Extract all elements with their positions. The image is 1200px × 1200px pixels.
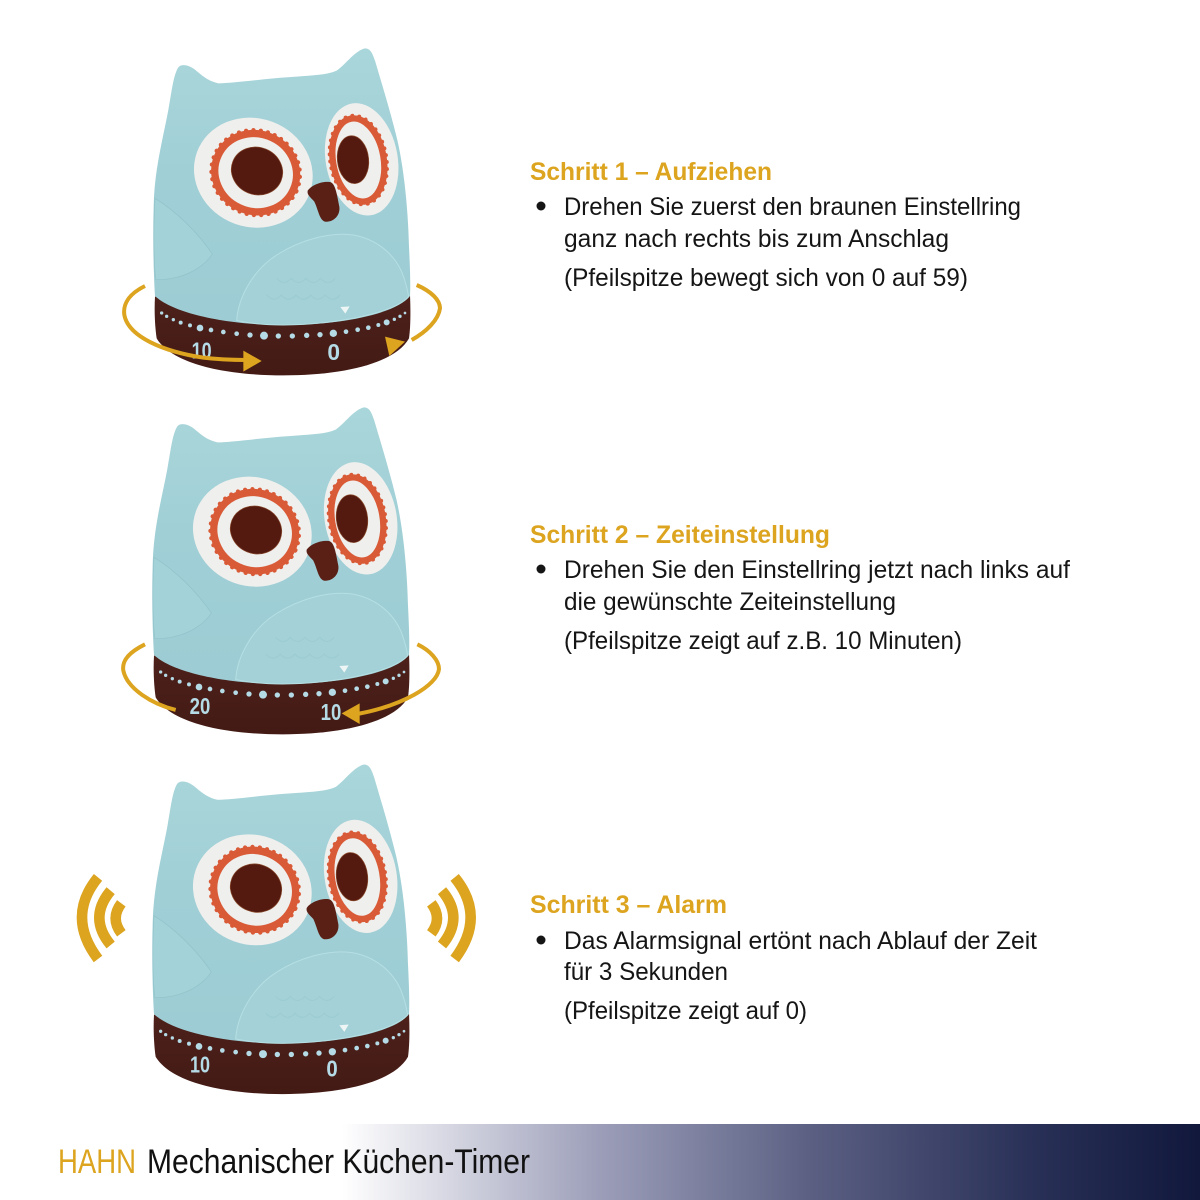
heading: step 3: Schritt 3 – Alarm bbox=[530, 891, 727, 919]
arrow: turn ring to the right bbox=[124, 285, 440, 372]
timer illustration: step 2 bbox=[123, 407, 439, 734]
instruction lines: die gewünschte Zeiteinstellung bbox=[564, 588, 896, 616]
instruction lines: (Pfeilspitze zeigt auf 0) bbox=[564, 997, 807, 1025]
timer illustration: step 3 bbox=[152, 764, 409, 1094]
bullet bbox=[536, 936, 546, 944]
text block: step 3 bbox=[530, 891, 1037, 1025]
instruction lines: Drehen Sie den Einstellring jetzt nach links auf bbox=[564, 556, 1070, 584]
heading: step 1: Schritt 1 – Aufziehen bbox=[530, 158, 772, 186]
dial number 20: 20 bbox=[190, 693, 210, 719]
footer product name: Mechanischer Küchen-Timer bbox=[147, 1143, 530, 1181]
instruction lines: ganz nach rechts bis zum Anschlag bbox=[564, 225, 949, 253]
dial number 10: 10 bbox=[192, 337, 212, 363]
instruction lines bbox=[564, 927, 1037, 1025]
timer illustration: step 1 bbox=[124, 48, 440, 375]
dial number 0: 0 bbox=[327, 339, 340, 365]
owl timer body bbox=[152, 764, 409, 1094]
bullet bbox=[536, 564, 546, 574]
instruction lines bbox=[564, 193, 1021, 292]
instruction lines: Drehen Sie zuerst den braunen Einstellring bbox=[564, 193, 1021, 221]
arrow: turn ring to the left bbox=[123, 644, 439, 724]
instruction lines: für 3 Sekunden bbox=[564, 958, 728, 986]
instruction lines bbox=[564, 556, 1070, 655]
dial number 10: 10 bbox=[321, 699, 341, 725]
instruction lines: Das Alarmsignal ertönt nach Ablauf der Zeit bbox=[564, 927, 1037, 955]
dial number 0: 0 bbox=[326, 1056, 338, 1082]
instruction lines: (Pfeilspitze bewegt sich von 0 auf 59) bbox=[564, 264, 968, 292]
icon: sound waves left bbox=[82, 877, 121, 959]
instruction lines: (Pfeilspitze zeigt auf z.B. 10 Minuten) bbox=[564, 627, 962, 655]
text block: step 1 bbox=[530, 158, 1021, 292]
owl timer body bbox=[153, 48, 410, 375]
footer gradient band bbox=[342, 1124, 1200, 1200]
icon: sound waves right bbox=[431, 877, 471, 959]
footer brand: HAHN: HAHN bbox=[58, 1143, 136, 1181]
bullet bbox=[536, 202, 546, 210]
text block: step 2 bbox=[530, 521, 1070, 655]
owl timer body bbox=[152, 407, 409, 734]
dial number 10: 10 bbox=[190, 1052, 210, 1078]
heading: step 2: Schritt 2 – Zeiteinstellung bbox=[530, 521, 830, 549]
